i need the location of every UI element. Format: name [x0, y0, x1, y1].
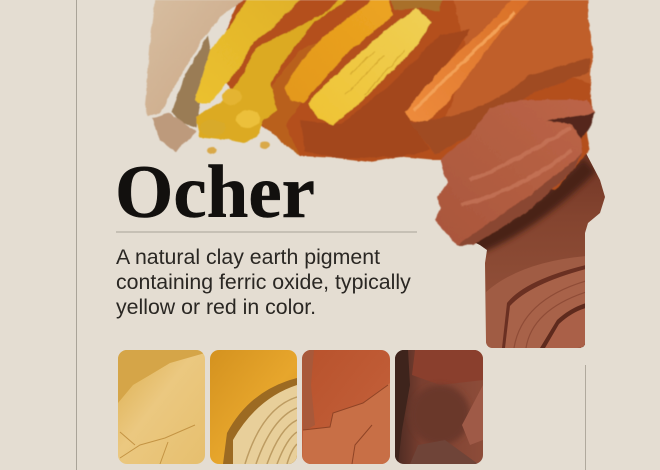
- orange streak band: [405, 0, 540, 122]
- gritty dark gap behind rock: [172, 35, 212, 128]
- lower beige rock: [152, 113, 196, 152]
- description: containing ferric oxide, typically: [116, 270, 411, 294]
- ridge shadow: [410, 58, 590, 155]
- slab dark seam: [546, 113, 594, 138]
- pigment composition image: [145, 0, 594, 245]
- swatch: red-orange ocher: [302, 350, 390, 464]
- swatch: golden ocher: [210, 350, 297, 464]
- stick grain: [345, 50, 405, 95]
- left margin line: [76, 0, 77, 470]
- slab front face shading: [457, 153, 582, 245]
- title: Ocher: [115, 151, 315, 234]
- swatch: yellow ocher: [118, 350, 205, 464]
- main orange-red powder mass: [215, 0, 593, 190]
- orange ocher stick: [285, 0, 393, 103]
- swatch: dark red ocher: [395, 350, 483, 464]
- description: A natural clay earth pigment: [116, 245, 380, 269]
- upper right burnt orange clay: [440, 0, 593, 130]
- yellow chunk: [195, 0, 312, 103]
- lower red-brown layered clay: [470, 147, 605, 348]
- terracotta slab: [435, 100, 594, 245]
- title rule: [116, 232, 417, 233]
- yellow powder spill: [195, 0, 365, 143]
- mid-tone powder near yellow: [262, 30, 345, 156]
- orange band highlight: [414, 12, 515, 110]
- light yellow ocher stick: [308, 8, 432, 125]
- darker powder under the sticks: [300, 30, 470, 158]
- description: yellow or red in color.: [116, 295, 316, 319]
- beige rock: [145, 0, 245, 115]
- ochre-brown top strip: [385, 0, 445, 12]
- powder specks: [207, 142, 270, 154]
- right margin line: [585, 365, 586, 470]
- slab highlight strata: [462, 128, 572, 205]
